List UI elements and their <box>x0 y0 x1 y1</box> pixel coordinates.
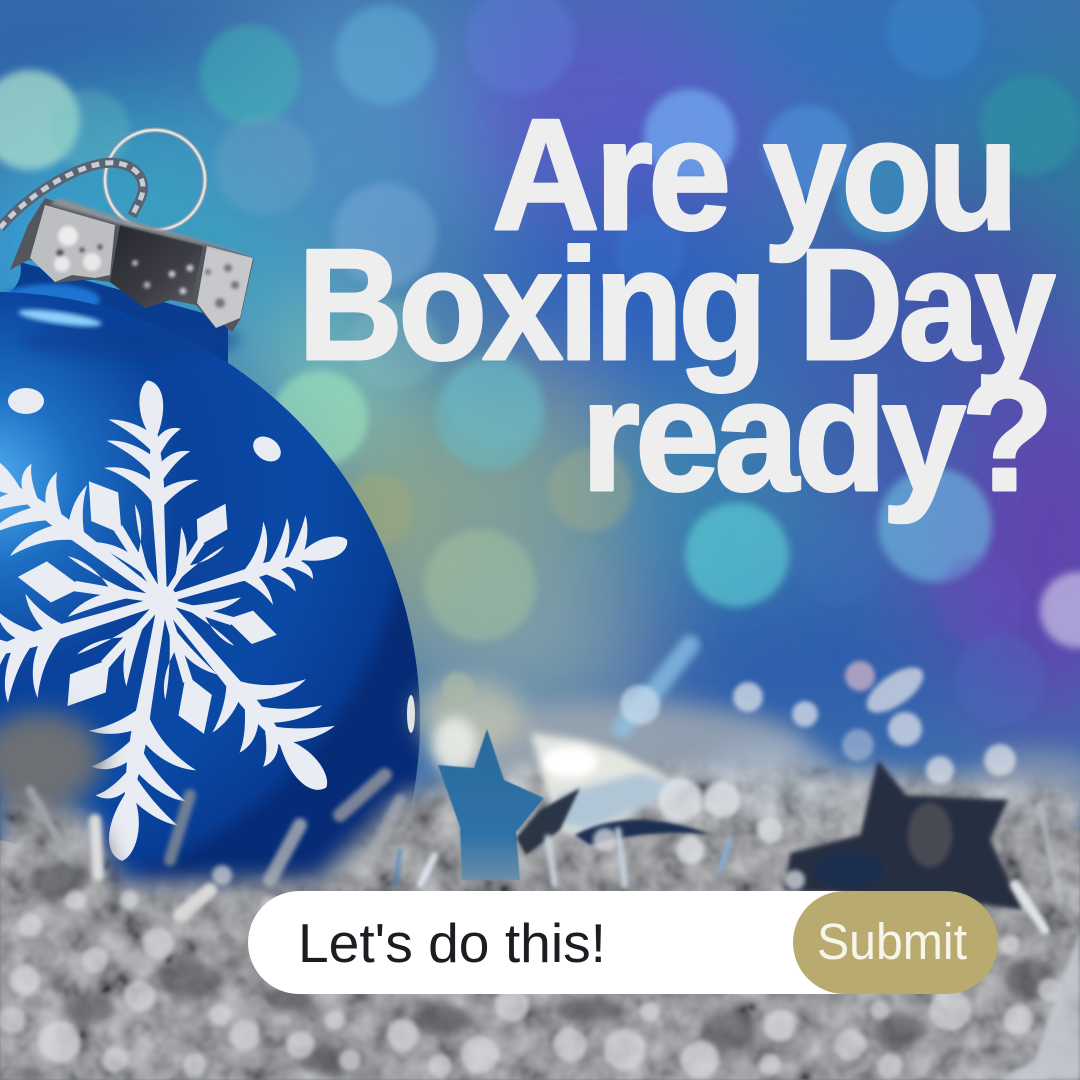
tinsel strands <box>30 775 1060 930</box>
star: dark large <box>785 760 1023 910</box>
glow behind blue star <box>433 717 477 773</box>
star: pale silver <box>531 733 684 840</box>
input text: Let's do this! <box>298 912 606 974</box>
ornament: blue bauble with snowflake <box>0 130 420 1000</box>
submit button <box>793 891 998 994</box>
ring: silver hanger loop <box>105 130 205 230</box>
title line 3: ready? <box>581 348 1049 524</box>
snowflake <box>0 378 368 871</box>
white dots on bauble <box>8 388 415 733</box>
bokeh highlights in tinsel <box>0 659 1080 1080</box>
bauble body <box>0 292 420 1000</box>
dark patches in tinsel <box>30 864 1054 1074</box>
neck of bauble <box>0 262 228 365</box>
tinsel: silver foreground <box>0 640 1080 1080</box>
title: Are you Boxing Day ready? <box>298 87 1056 524</box>
input bar: white pill <box>248 891 998 994</box>
bokeh light circles <box>0 0 1080 725</box>
light streak above stars <box>622 645 690 728</box>
cap: silver metal crown <box>10 198 254 332</box>
star: blue <box>438 729 544 880</box>
submit button: Submit <box>817 913 967 970</box>
stars: decorations in tinsel <box>433 717 1023 910</box>
cord: silver twisted string <box>0 163 143 228</box>
title line 1: Are you <box>492 87 1014 263</box>
star: dark small <box>516 788 580 855</box>
